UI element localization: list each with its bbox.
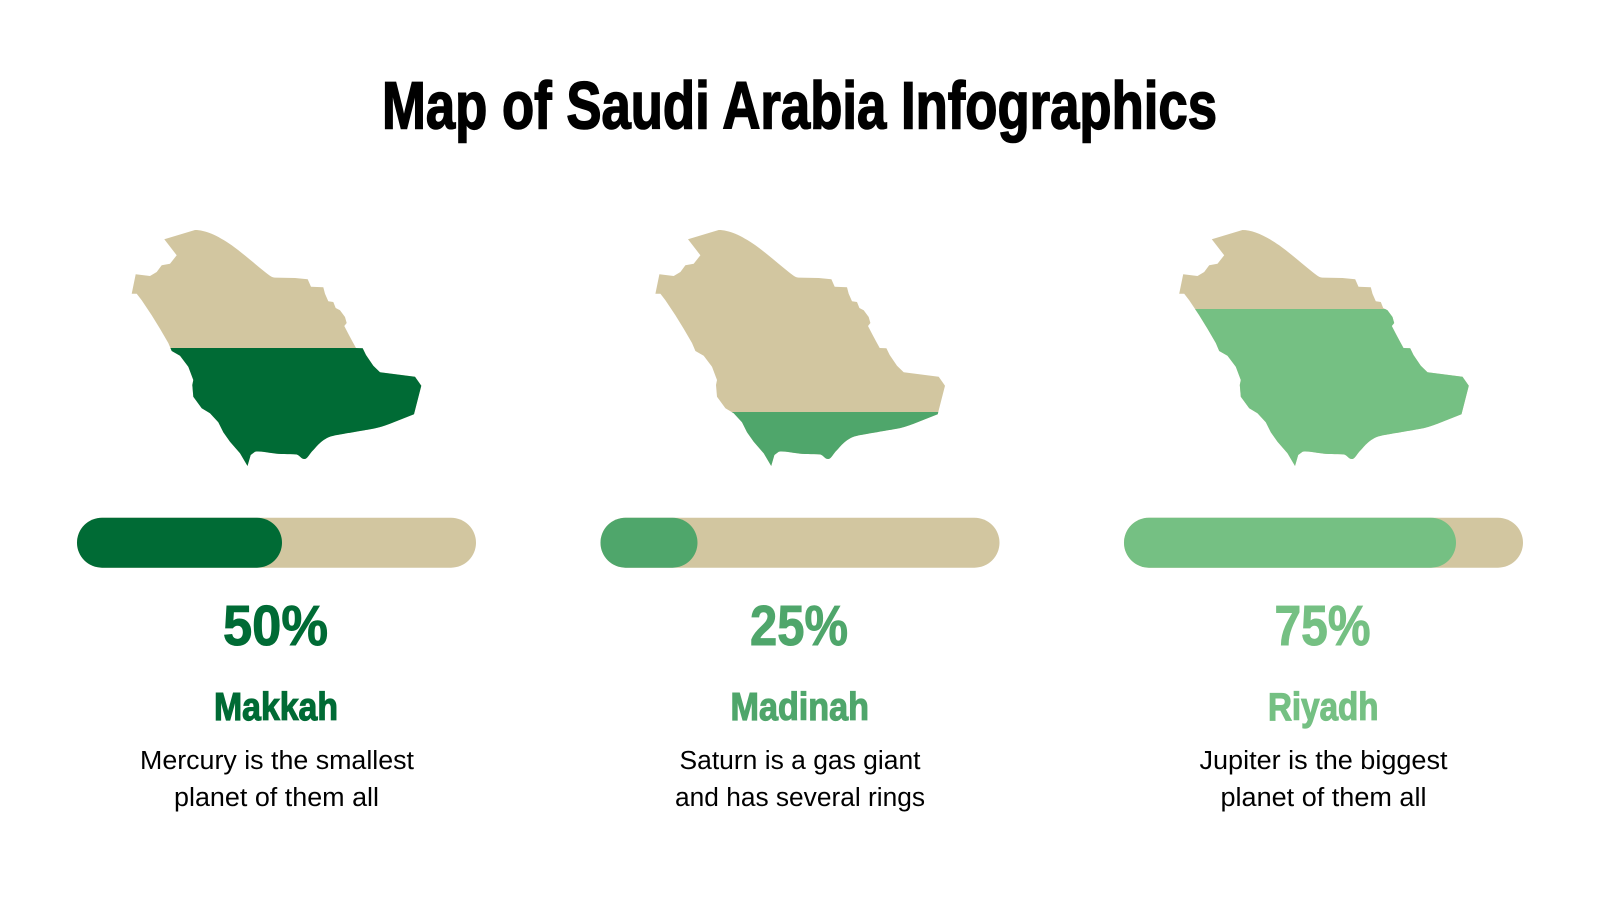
map: Madinah 25% <box>656 230 945 466</box>
description: Madinah <box>675 747 925 812</box>
description: Madinah: and has several rings <box>675 784 925 812</box>
value: 75%: 75% <box>1274 594 1370 658</box>
description: Riyadh: planet of them all <box>1220 784 1426 812</box>
title: Map of Saudi Arabia Infographics <box>382 68 1217 144</box>
description: Makkah: planet of them all <box>174 784 379 812</box>
value: 50%: 50% <box>223 594 328 658</box>
description: Madinah: Saturn is a gas giant <box>680 747 920 775</box>
value: 25%: 25% <box>750 594 848 658</box>
description: Makkah: Mercury is the smallest <box>140 747 414 775</box>
panel: Madinah <box>600 210 1000 812</box>
heading: Riyadh: Riyadh <box>1268 686 1378 729</box>
progress bar: Makkah <box>77 518 476 568</box>
description: Riyadh <box>1200 747 1448 812</box>
heading: Makkah: Makkah <box>214 686 338 729</box>
progress bar: Riyadh <box>1124 518 1523 568</box>
panel: Riyadh <box>1124 210 1523 812</box>
heading: Madinah: Madinah <box>730 686 869 729</box>
panel: Makkah <box>77 210 476 812</box>
progress bar: Madinah <box>600 518 1000 568</box>
description: Makkah <box>140 747 414 812</box>
map: Riyadh 75% <box>1179 230 1469 466</box>
description: Riyadh: Jupiter is the biggest <box>1200 747 1448 775</box>
map: Makkah 50% <box>132 230 422 466</box>
